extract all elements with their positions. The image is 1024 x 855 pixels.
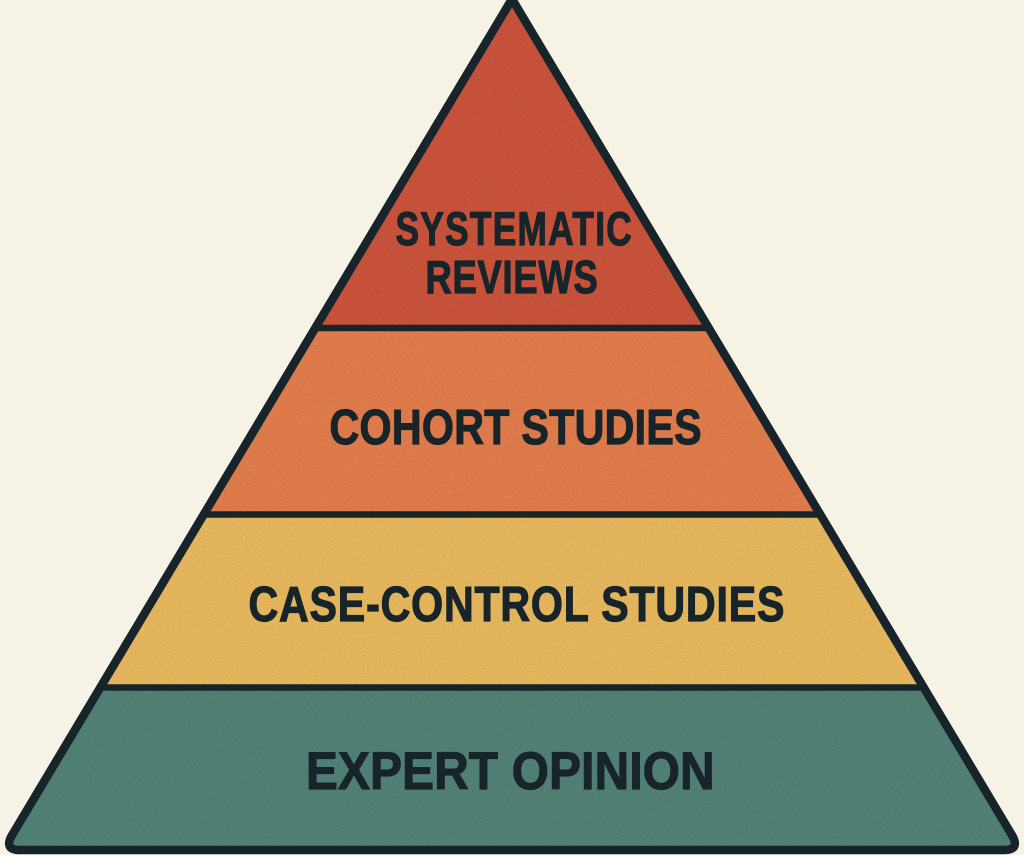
tier: cohort studies fill	[210, 331, 814, 512]
label: expert opinion: EXPERT OPINION	[306, 741, 715, 801]
tier: systematic reviews fill	[322, 7, 702, 325]
label: systematic reviews: SYSTEMATIC	[396, 202, 632, 255]
label: systematic reviews: REVIEWS	[426, 251, 598, 303]
label: cohort studies: COHORT STUDIES	[330, 400, 702, 455]
tier: case-control studies fill	[107, 518, 917, 684]
tier: expert opinion fill	[0, 687, 1024, 850]
label: systematic reviews	[396, 202, 632, 303]
label: case-control studies: CASE-CONTROL STUDIES	[248, 577, 784, 632]
